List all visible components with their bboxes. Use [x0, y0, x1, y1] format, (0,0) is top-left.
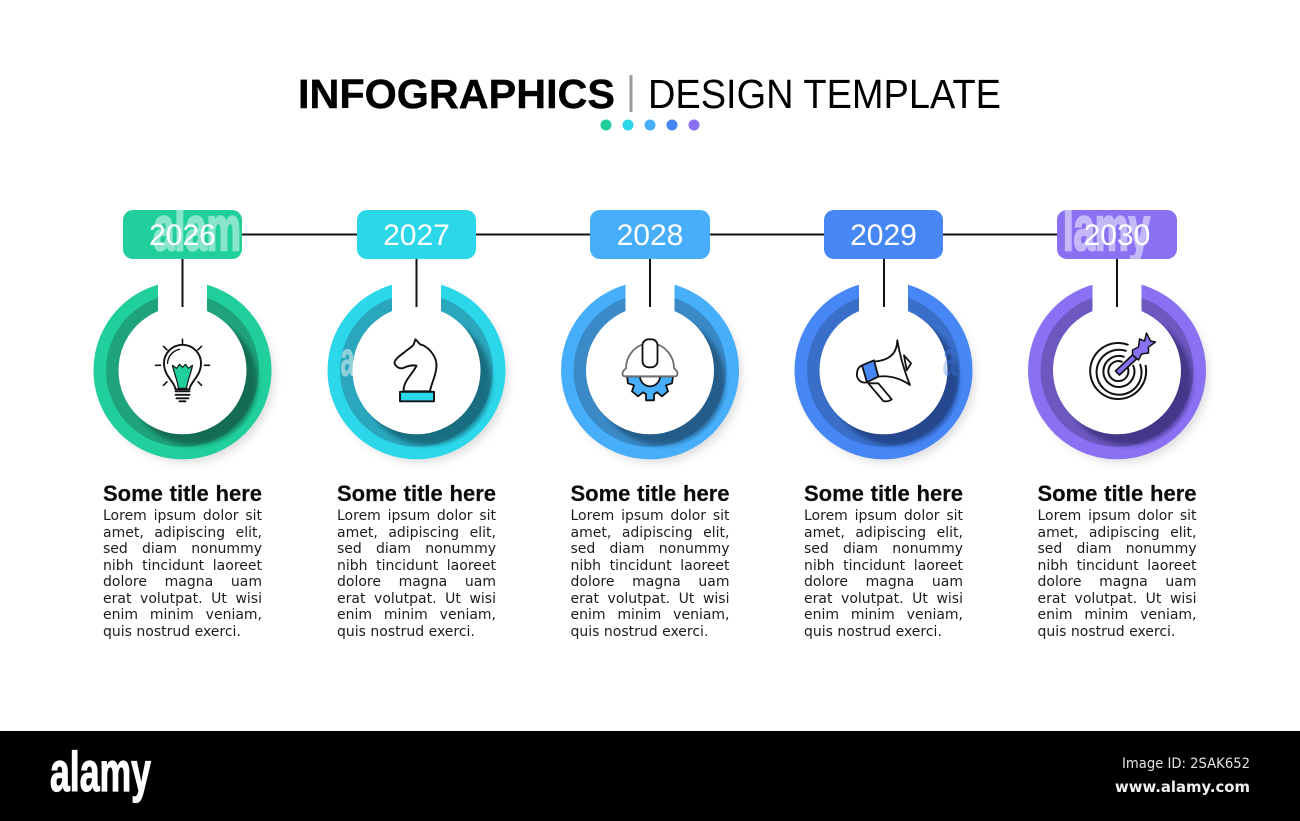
text block 2029: Some title here [804, 481, 963, 506]
text block 2027: quis nostrud exerci. [337, 624, 475, 640]
text block 2027: sed diam nonummy [337, 541, 496, 557]
text block 2030: Lorem ipsum dolor sit [1038, 508, 1196, 524]
text block 2030: dolore magna uam [1038, 574, 1196, 590]
year badge 2026: 2026 [149, 219, 216, 252]
title colour dots [600, 120, 700, 130]
icon: target with arrow [1090, 333, 1156, 399]
icon: megaphone [857, 340, 911, 401]
ring 2028 [561, 278, 741, 462]
connector stem 2029 [883, 259, 885, 307]
text block 2026: sed diam nonummy [103, 541, 262, 557]
connector stem 2028 [649, 259, 651, 307]
year badge 2028 [590, 210, 710, 259]
text block 2026: amet, adipiscing elit, [103, 525, 262, 541]
text block 2026 [103, 481, 262, 640]
text block 2029: amet, adipiscing elit, [804, 525, 963, 541]
text block 2029: quis nostrud exerci. [804, 624, 942, 640]
text block 2026: dolore magna uam [103, 574, 262, 590]
panel: 2029 [794, 210, 974, 462]
icon: light bulb [156, 339, 210, 401]
ring 2030 [1028, 278, 1208, 462]
connector stem 2027 [416, 259, 418, 307]
text block 2028: quis nostrud exerci. [570, 624, 708, 640]
year badge 2030: 2030 [1084, 219, 1150, 252]
text block 2029: sed diam nonummy [804, 541, 963, 557]
text block 2028: erat volutpat. Ut wisi [570, 591, 730, 607]
text block 2030: quis nostrud exerci. [1038, 624, 1175, 640]
text block 2027: nibh tincidunt laoreet [337, 558, 496, 574]
text block 2030 [1038, 481, 1196, 640]
ring 2029: a [942, 333, 957, 386]
text block 2028: enim minim veniam, [570, 607, 730, 623]
title separator [630, 75, 632, 112]
ring 2027 [328, 278, 508, 462]
panel: 2030 [1028, 195, 1208, 462]
title [298, 71, 1001, 117]
year badge 2026 [123, 210, 242, 259]
panel: 2027 [328, 210, 508, 462]
icon: chess knight [394, 339, 436, 401]
text block 2029: enim minim veniam, [804, 607, 963, 623]
text block 2030: sed diam nonummy [1038, 541, 1196, 557]
text block 2030: erat volutpat. Ut wisi [1038, 591, 1196, 607]
text block 2027: erat volutpat. Ut wisi [337, 591, 496, 607]
text block 2029: erat volutpat. Ut wisi [804, 591, 963, 607]
footer bar [0, 731, 1300, 821]
text block 2027: Some title here [337, 481, 496, 506]
text block 2030: amet, adipiscing elit, [1038, 525, 1196, 541]
text block 2027 [337, 481, 496, 640]
text block 2027: dolore magna uam [337, 574, 496, 590]
text block 2030: nibh tincidunt laoreet [1038, 558, 1196, 574]
text block 2026: Some title here [103, 481, 262, 506]
text block 2028: Some title here [570, 481, 730, 506]
text block 2026: enim minim veniam, [103, 607, 262, 623]
panel: 2026 [94, 195, 274, 462]
text block 2028: sed diam nonummy [570, 541, 730, 557]
text block 2028: Lorem ipsum dolor sit [570, 508, 730, 524]
icon: helmet and gear [623, 339, 677, 400]
ring 2026 [94, 278, 274, 462]
footer logo: alamy [50, 740, 151, 803]
text block 2029: nibh tincidunt laoreet [804, 558, 963, 574]
title regular part: DESIGN TEMPLATE [648, 71, 1001, 117]
timeline connector line [182, 234, 1117, 236]
panel: 2028 [561, 210, 741, 462]
connector stem 2030 [1116, 259, 1118, 307]
year badge 2030: lamy [1063, 195, 1150, 264]
text block 2026: erat volutpat. Ut wisi [103, 591, 262, 607]
text block 2027: enim minim veniam, [337, 607, 496, 623]
year badge 2027: 2027 [383, 219, 450, 252]
text block 2028 [570, 481, 730, 640]
image id: Image ID: 2SAK652 [1122, 756, 1250, 772]
year badge 2029 [824, 210, 943, 259]
year badge 2026: alam [153, 195, 241, 264]
website: www.alamy.com [1115, 778, 1250, 796]
text block 2029: dolore magna uam [804, 574, 963, 590]
text block 2029 [804, 481, 963, 640]
text block 2026: quis nostrud exerci. [103, 624, 241, 640]
connector stem 2026 [182, 259, 184, 307]
text block 2027: Lorem ipsum dolor sit [337, 508, 496, 524]
year badge 2028: 2028 [617, 219, 683, 252]
text block 2028: dolore magna uam [570, 574, 730, 590]
ring 2029 [794, 278, 974, 462]
year badge 2027 [357, 210, 476, 259]
ring 2027: a [340, 333, 355, 386]
text block 2026: nibh tincidunt laoreet [103, 558, 262, 574]
text block 2028: nibh tincidunt laoreet [570, 558, 730, 574]
text block 2026: Lorem ipsum dolor sit [103, 508, 262, 524]
text block 2029: Lorem ipsum dolor sit [804, 508, 963, 524]
title bold part: INFOGRAPHICS [298, 71, 615, 117]
text block 2030: Some title here [1038, 481, 1196, 506]
text block 2027: amet, adipiscing elit, [337, 525, 496, 541]
year badge 2030 [1057, 210, 1177, 259]
year badge 2029: 2029 [850, 219, 917, 252]
text block 2028: amet, adipiscing elit, [570, 525, 730, 541]
text block 2030: enim minim veniam, [1038, 607, 1196, 623]
